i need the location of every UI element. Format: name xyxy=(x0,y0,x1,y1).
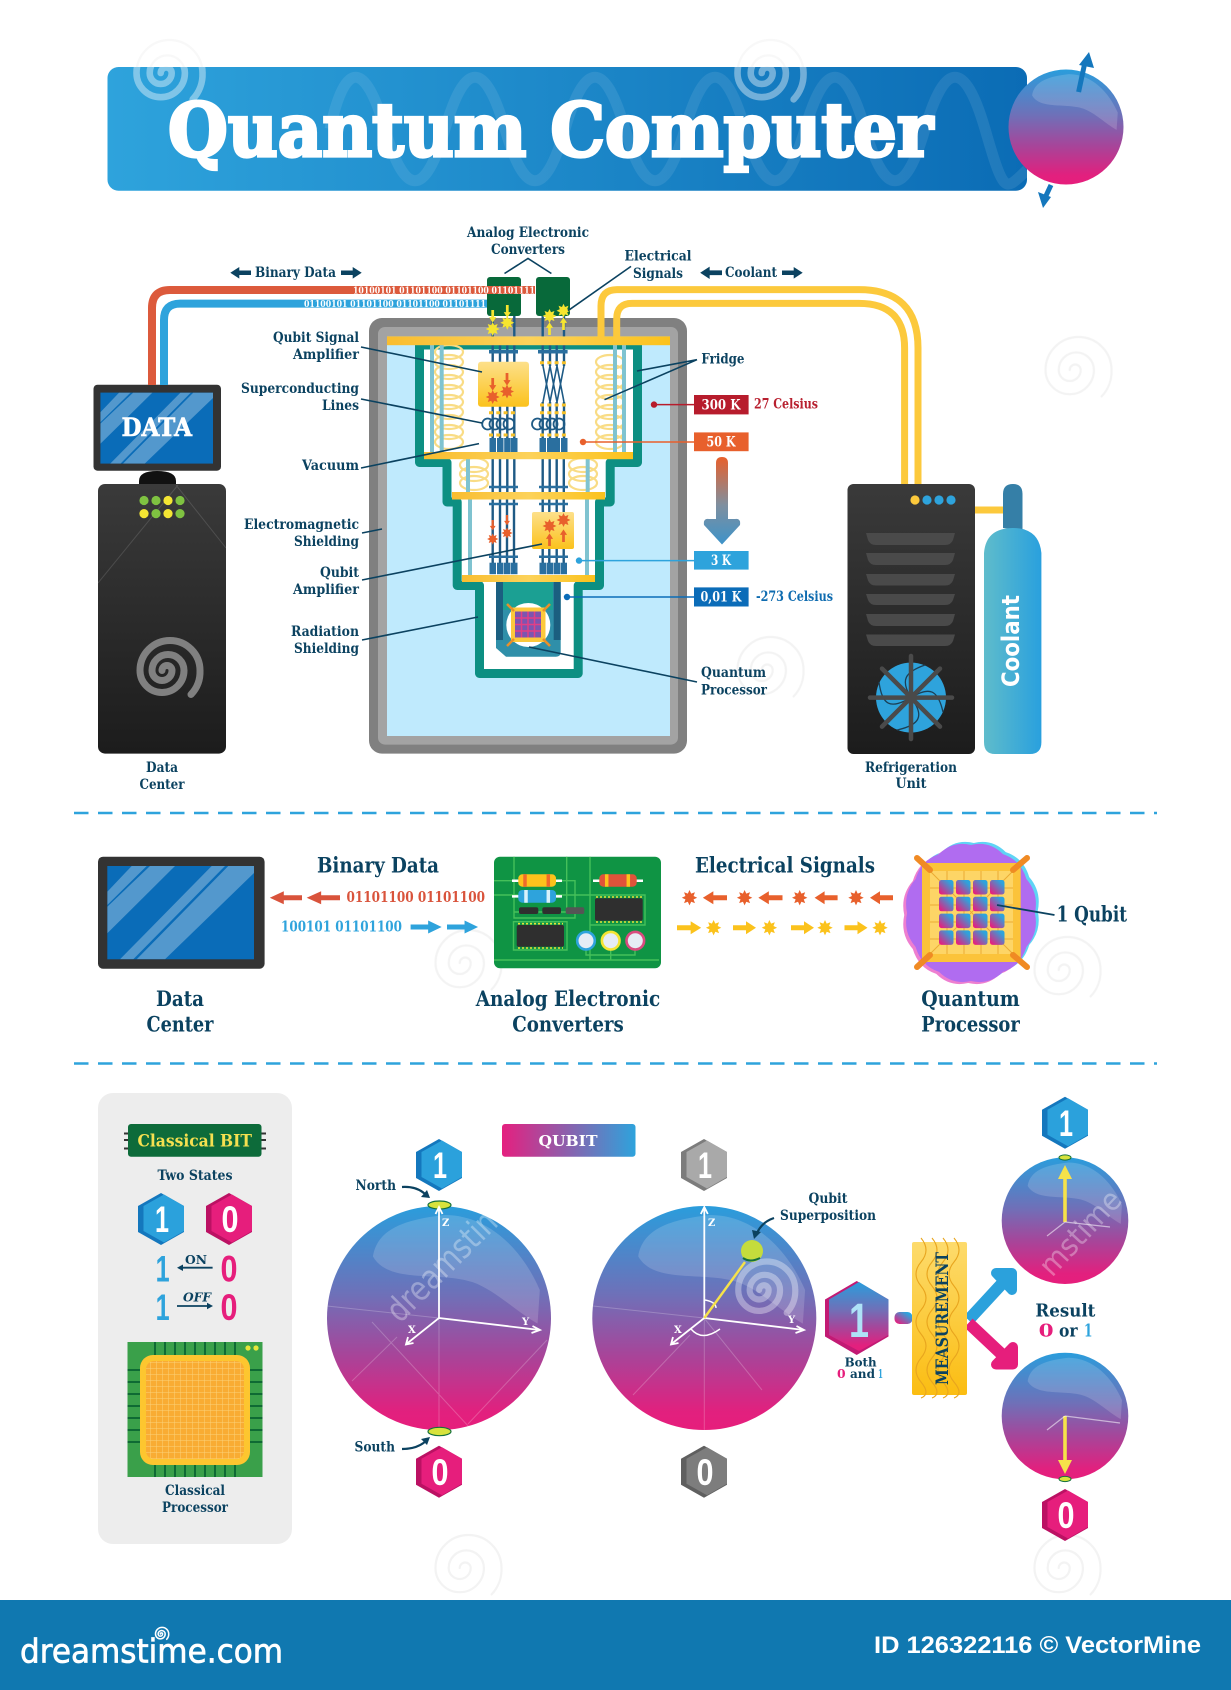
label: data center: Data xyxy=(146,760,178,776)
arrow: result 0 xyxy=(968,1323,1013,1364)
bloch sphere: superposition: Z xyxy=(708,1218,715,1229)
coolant cylinder: Coolant xyxy=(997,595,1025,687)
labels: fridge left side: Qubit xyxy=(320,565,359,581)
label: both 0 and 1: and xyxy=(850,1366,875,1381)
label: both 0 and 1: Both xyxy=(845,1355,877,1370)
labels: fridge left side: Radiation xyxy=(291,624,359,640)
label: fridge: Fridge xyxy=(701,352,744,368)
callout: 1 qubit: 1 Qubit xyxy=(1057,902,1127,927)
divider xyxy=(74,1062,1157,1065)
label: result 0 or 1: Result xyxy=(1035,1301,1096,1322)
label: flow electrical signals: Electrical Signals xyxy=(695,853,875,878)
label: refrigeration unit xyxy=(865,760,957,792)
label: flow analog converters: Converters xyxy=(512,1012,624,1037)
connector into measurement xyxy=(894,1312,912,1324)
callout: 1 qubit xyxy=(997,902,1127,927)
footer credit: ID 126322116 © VectorMine xyxy=(874,1632,1201,1659)
icon: title qubit sphere xyxy=(1008,52,1124,208)
off state xyxy=(156,1287,238,1328)
labels: top converters and signals xyxy=(466,225,692,282)
temperature scale xyxy=(564,395,833,606)
label: flow quantum processor: Processor xyxy=(921,1012,1021,1037)
hexagon: north 1: 1 xyxy=(433,1145,447,1186)
labels: fridge left side: Superconducting xyxy=(241,381,359,397)
result sphere: 1 xyxy=(1002,1155,1129,1284)
labels: fridge left side: Vacuum xyxy=(301,458,359,474)
50 K tag xyxy=(580,432,749,451)
label: two states: Two States xyxy=(158,1168,233,1184)
binary data pipes: 01100101 01101100 01101100 01101111 xyxy=(304,299,486,310)
3 K tag: 3 K xyxy=(711,553,732,569)
label: south xyxy=(354,1437,430,1456)
refrigeration unit xyxy=(848,484,975,754)
label: south: South xyxy=(354,1440,395,1456)
faint watermark spirals xyxy=(136,40,1112,1594)
labels: top converters and signals: Electrical xyxy=(624,248,692,264)
flow: analog electronic converter board xyxy=(494,857,661,968)
on state xyxy=(156,1249,238,1290)
qubit signal amplifier xyxy=(478,362,529,407)
icon: hexagon 1: 1 xyxy=(155,1199,169,1240)
hexagon: result 1 xyxy=(1042,1097,1088,1149)
icon: hexagon 0: 0 xyxy=(222,1199,238,1240)
bloch sphere: superposition xyxy=(592,1206,816,1430)
result sphere: 1: mstime xyxy=(1032,1183,1129,1283)
binary data flow: outgoing: 01101100 01101100 xyxy=(346,889,485,906)
bloch sphere: poles: Z xyxy=(442,1218,449,1229)
label: flow data center xyxy=(146,986,214,1037)
label: data center: Center xyxy=(140,777,185,793)
bloch sphere: poles: dreamstime xyxy=(378,1183,525,1330)
superconducting lines xyxy=(489,316,568,563)
hexagon: result 0 xyxy=(1042,1489,1088,1541)
quantum processor chamber xyxy=(496,582,561,657)
qubit amplifier xyxy=(487,512,574,549)
0,01 K tag: -273 Celsius xyxy=(756,589,833,605)
labels: fridge left side: Amplifier xyxy=(292,347,360,363)
on state: 1 xyxy=(156,1249,170,1290)
coolant pipes xyxy=(601,290,1003,510)
footer logo text: dreamstime.com xyxy=(20,1632,283,1671)
hexagon: gray 0 xyxy=(681,1446,727,1498)
label: refrigeration unit: Refrigeration xyxy=(865,760,957,776)
label: result 0 or 1: or xyxy=(1059,1321,1078,1342)
label: north xyxy=(356,1178,430,1198)
labels: fridge left side: Qubit Signal xyxy=(273,330,359,346)
label: flow analog converters: Analog Electronic xyxy=(475,986,660,1011)
coupling rings xyxy=(482,418,564,430)
resistors xyxy=(512,874,643,903)
panel: classical bit xyxy=(98,1093,292,1544)
label: result 0 or 1: 0 xyxy=(1039,1321,1054,1342)
filter blocks xyxy=(490,438,568,574)
icon: both states hexagon: 1 xyxy=(849,1295,869,1348)
hexagon: gray 0: 0 xyxy=(696,1452,714,1493)
title text: Quantum Computer xyxy=(168,88,934,174)
coolant cylinder xyxy=(984,484,1041,754)
on state: ON xyxy=(185,1252,207,1267)
label: qubit superposition: Superposition xyxy=(780,1208,876,1224)
label: classical processor xyxy=(162,1483,229,1516)
heading: qubit xyxy=(502,1124,636,1157)
on state: 0 xyxy=(220,1249,238,1290)
bloch sphere: poles xyxy=(327,1183,551,1436)
data center: tower xyxy=(98,471,226,754)
labels: top converters and signals: Signals xyxy=(633,266,683,282)
label: flow analog converters xyxy=(475,986,660,1037)
50 K tag: 50 K xyxy=(706,434,737,450)
labels: fridge left side: Amplifier xyxy=(292,582,360,598)
off state: 0 xyxy=(220,1287,238,1328)
labels: fridge left side xyxy=(241,330,360,657)
label: flow data center: Center xyxy=(146,1012,214,1037)
off state: 1 xyxy=(156,1287,170,1328)
labels: fridge left side: Lines xyxy=(322,398,359,414)
bloch sphere: poles: Y xyxy=(521,1317,530,1328)
label: classical processor: Classical xyxy=(165,1483,225,1499)
flow: quantum processor xyxy=(903,842,1039,984)
leader lines xyxy=(361,258,697,682)
off state: OFF xyxy=(183,1290,212,1305)
heading: qubit: QUBIT xyxy=(538,1132,598,1150)
panel: fridge xyxy=(369,318,687,754)
measurement block: MEASUREMENT xyxy=(933,1252,953,1385)
label: flow data center: Data xyxy=(156,986,204,1011)
label: qubit superposition: Qubit xyxy=(808,1191,848,1207)
hexagon: south 0: 0 xyxy=(432,1452,448,1493)
label: both 0 and 1 xyxy=(837,1355,883,1381)
gold stage plates xyxy=(387,336,670,582)
heading: classical bit xyxy=(124,1124,266,1157)
measurement block xyxy=(912,1238,967,1398)
hexagon: gray 1 xyxy=(681,1139,727,1191)
label: qubit superposition xyxy=(752,1191,876,1239)
label: both 0 and 1: 0 xyxy=(837,1367,846,1381)
300 K tag: 27 Celsius xyxy=(754,396,818,412)
qubit state vector xyxy=(704,1240,763,1318)
binary data pipes: 10100101 01101100 01101100 01101111 xyxy=(353,286,535,296)
icon: hexagon 0 xyxy=(206,1193,252,1245)
0,01 K tag: 0,01 K xyxy=(700,590,743,606)
labels: fridge left side: Shielding xyxy=(294,641,359,657)
flow: data center monitor xyxy=(98,857,265,969)
labels: top converters and signals: Converters xyxy=(491,242,565,258)
binary data flow: incoming: 100101 01101100 xyxy=(281,918,402,936)
label: quantum processor xyxy=(701,665,768,699)
binary data pipes xyxy=(152,286,535,385)
fridge coils and rods xyxy=(432,345,624,575)
north cap xyxy=(428,1201,451,1209)
arrow: result 1 xyxy=(968,1273,1012,1320)
label: binary data with arrows: Binary Data xyxy=(255,265,336,281)
labels: fridge left side: Shielding xyxy=(294,534,359,550)
label: flow quantum processor xyxy=(921,986,1021,1037)
electrical signals: outgoing xyxy=(682,890,893,905)
hexagon: result 1: 1 xyxy=(1059,1103,1073,1144)
electrical signals: incoming xyxy=(677,920,888,935)
axes xyxy=(406,1207,540,1344)
3 K tag xyxy=(576,551,749,570)
label: result 0 or 1 xyxy=(1035,1301,1096,1342)
capacitors xyxy=(577,932,644,950)
data center: monitor: DATA xyxy=(122,413,193,442)
label: result 0 or 1: 1 xyxy=(1084,1321,1092,1342)
binary data flow: outgoing xyxy=(270,889,485,906)
radiation shielding stepped wall xyxy=(420,345,638,674)
bloch sphere: superposition: Y xyxy=(787,1315,796,1326)
label: north: North xyxy=(356,1178,396,1194)
divider xyxy=(74,812,1157,814)
label: flow quantum processor: Quantum xyxy=(921,986,1020,1011)
300 K tag: 300 K xyxy=(702,398,742,414)
labels: fridge left side: Electromagnetic xyxy=(244,517,359,533)
icon: classical processor xyxy=(128,1342,262,1477)
label: quantum processor: Quantum xyxy=(701,665,766,681)
result sphere: 0 xyxy=(1002,1353,1128,1482)
label: coolant with arrows: Coolant xyxy=(725,265,777,281)
icon: both states hexagon xyxy=(825,1281,888,1355)
qubit cells xyxy=(939,880,1004,945)
bloch sphere: superposition: X xyxy=(674,1325,682,1336)
hexagon: north 1 xyxy=(416,1139,462,1191)
label: quantum processor: Processor xyxy=(701,683,768,699)
cooling arrow xyxy=(704,457,740,544)
label: classical processor: Processor xyxy=(162,1500,229,1516)
footer bar xyxy=(0,1600,1231,1690)
label: flow binary data: Binary Data xyxy=(317,853,439,878)
chips xyxy=(517,898,643,947)
data center: monitor xyxy=(94,385,221,471)
0,01 K tag xyxy=(564,587,833,606)
analog electronic converters xyxy=(486,277,570,336)
labels: top converters and signals: Analog Electronic xyxy=(466,225,589,241)
heading: classical bit: Classical BIT xyxy=(138,1132,252,1152)
label: refrigeration unit: Unit xyxy=(896,776,927,792)
icon: hexagon 1 xyxy=(138,1193,184,1245)
label: data center xyxy=(140,760,185,793)
title banner xyxy=(108,40,1027,191)
icon: fan xyxy=(870,656,952,739)
bloch sphere: poles: X xyxy=(408,1325,416,1336)
hexagon: gray 1: 1 xyxy=(698,1145,712,1186)
footer logo spiral xyxy=(156,1627,169,1639)
hexagon: south 0 xyxy=(416,1446,462,1498)
300 K tag xyxy=(651,395,818,414)
label: both 0 and 1: 1 xyxy=(878,1367,883,1381)
south cap xyxy=(428,1427,451,1436)
hexagon: result 0: 0 xyxy=(1058,1495,1074,1536)
label: coolant with arrows xyxy=(700,265,803,281)
